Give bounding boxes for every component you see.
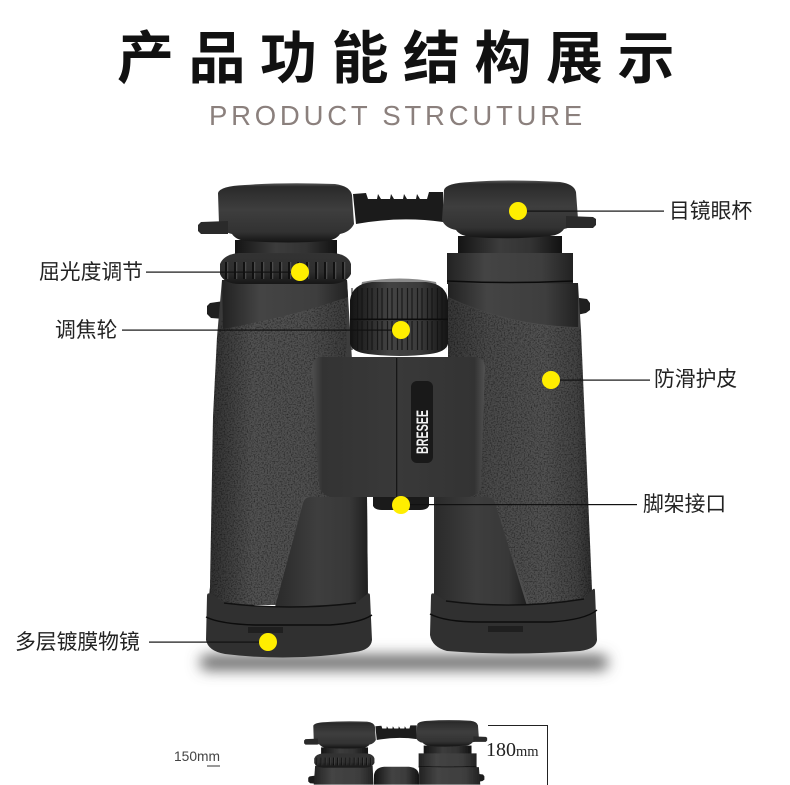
brand badge: BRESEE (414, 410, 432, 454)
right collar (448, 283, 578, 327)
marker: anti-slip skin (542, 371, 560, 389)
title: 产品功能结构展示 (117, 27, 689, 91)
small binoculars thumbnail (304, 720, 487, 785)
right lower smooth panel (434, 497, 527, 606)
left barrel texture (208, 296, 347, 605)
right barrel (434, 283, 592, 606)
width label underline (207, 766, 220, 767)
callout line: anti-slip skin (551, 380, 650, 381)
label: diopter adjustment: 屈光度调节 (39, 261, 143, 284)
right barrel texture (448, 298, 592, 606)
left barrel (208, 280, 368, 605)
callout line: eyepiece cup (517, 210, 664, 212)
label: anti-slip skin: 防滑护皮 (654, 368, 737, 391)
marker: eyepiece cup (509, 202, 527, 220)
left objective ring (206, 593, 372, 658)
callout line: tripod port (401, 504, 637, 505)
marker: diopter (291, 263, 309, 281)
label: focus wheel: 调焦轮 (55, 319, 117, 342)
label: width 150mm: 150mm (174, 749, 220, 764)
marker: tripod port (392, 496, 410, 514)
center bridge (312, 357, 485, 497)
height dimension bracket (488, 726, 548, 785)
label: height 180mm: 180mm (486, 739, 539, 761)
subtitle: PRODUCT STRCUTURE (209, 100, 586, 131)
label: coated lens: 多层镀膜物镜 (15, 631, 140, 654)
tripod socket (373, 497, 429, 510)
right objective ring (430, 589, 597, 654)
label: eyepiece cup: 目镜眼杯 (669, 200, 752, 223)
left side nub (207, 301, 224, 319)
marker: coated lens (259, 633, 277, 651)
ground shadow (200, 655, 608, 670)
label: tripod port: 脚架接口 (643, 493, 726, 516)
left lower smooth panel (275, 497, 368, 607)
brand badge (411, 381, 433, 463)
right side nub (572, 297, 590, 316)
callout line: coated lens (149, 642, 268, 643)
callout line: diopter (146, 272, 300, 273)
callout line: focus wheel (122, 330, 401, 331)
focus wheel (350, 278, 448, 356)
eyepieces and strap (198, 180, 596, 284)
left collar (222, 280, 348, 329)
marker: focus wheel (392, 321, 410, 339)
